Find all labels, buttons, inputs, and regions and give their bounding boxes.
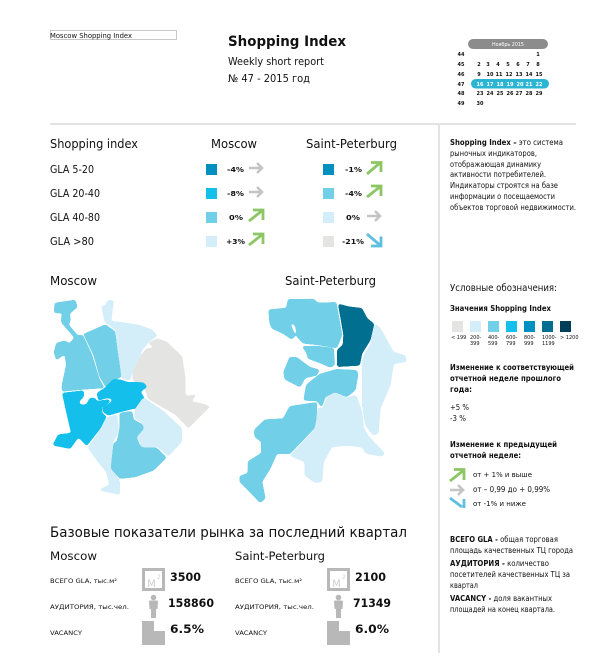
panel: Saint-Peterburg indicators: 2100 bbox=[355, 570, 386, 584]
legend: index values: 599 bbox=[488, 341, 498, 347]
table headings: Saint-Peterburg bbox=[306, 137, 397, 151]
legend: definitions: площадь качественных ТЦ города bbox=[450, 546, 573, 555]
calendar: 44 bbox=[458, 52, 465, 58]
legend: definitions bbox=[450, 535, 573, 614]
legend: index values: 400- bbox=[488, 335, 500, 341]
calendar: 28 bbox=[526, 91, 533, 97]
panel: Saint-Peterburg indicators bbox=[235, 549, 391, 645]
legend: year-over-year change: Изменение к соответствующей bbox=[450, 363, 574, 372]
calendar: 8 bbox=[536, 62, 540, 68]
icon: area: м bbox=[332, 576, 341, 591]
calendar: 12 bbox=[506, 72, 513, 78]
icon: area bbox=[328, 570, 348, 591]
calendar: 30 bbox=[477, 101, 484, 107]
icon: vacancy bbox=[142, 621, 165, 645]
calendar: 46 bbox=[458, 72, 465, 78]
calendar: 15 bbox=[536, 72, 543, 78]
legend: index values: 999 bbox=[524, 341, 534, 347]
legend: definitions: АУДИТОРИЯ - количество bbox=[450, 559, 549, 568]
calendar: 18 bbox=[497, 82, 504, 88]
calendar: 21 bbox=[526, 82, 533, 88]
row: GLA >80: -21% bbox=[342, 238, 364, 246]
calendar: 11 bbox=[496, 72, 503, 78]
icon: area: м bbox=[147, 576, 156, 591]
row: GLA 40-80: 0% bbox=[346, 214, 360, 222]
calendar: Ноябрь 2015 bbox=[492, 42, 524, 48]
legend: index values: < 199 bbox=[451, 335, 466, 341]
calendar: 17 bbox=[487, 82, 494, 88]
calendar: 14 bbox=[526, 72, 533, 78]
icon: area: 2 bbox=[342, 574, 346, 581]
calendar: 24 bbox=[487, 91, 494, 97]
legend: index values bbox=[450, 304, 579, 347]
calendar: 48 bbox=[458, 91, 465, 97]
title block bbox=[228, 34, 347, 85]
calendar: 16 bbox=[477, 82, 484, 88]
row: GLA 40-80: 0% bbox=[229, 214, 243, 222]
calendar: 4 bbox=[496, 62, 500, 68]
legend: year-over-year change: отчетной неделе прошлого bbox=[450, 374, 561, 383]
panel: Moscow indicators: 158860 bbox=[168, 596, 214, 610]
icon: area: 2 bbox=[157, 574, 161, 581]
description text: информации о посещаемости bbox=[450, 192, 555, 201]
map: Saint-Peterburg: Saint-Peterburg bbox=[285, 274, 376, 288]
title block: Shopping Index bbox=[228, 34, 347, 50]
panel: Saint-Peterburg indicators: VACANCY bbox=[235, 629, 267, 637]
panel: Saint-Peterburg indicators: 6.0% bbox=[355, 622, 389, 636]
calendar: 45 bbox=[458, 62, 465, 68]
panel: Moscow indicators: АУДИТОРИЯ, тыс.чел. bbox=[50, 603, 129, 611]
panel: Moscow indicators: ВСЕГО GLA, тыс.м² bbox=[50, 577, 117, 585]
row: GLA 20-40: -4% bbox=[345, 190, 362, 198]
calendar: 10 bbox=[487, 72, 494, 78]
legend: week-over-week change: Изменение к предыдущей bbox=[450, 440, 557, 449]
calendar: 20 bbox=[517, 82, 524, 88]
legend: year-over-year change: +5 % bbox=[450, 403, 469, 412]
calendar: 13 bbox=[516, 72, 523, 78]
title block: Weekly short report bbox=[228, 56, 324, 68]
calendar: 47 bbox=[458, 82, 465, 88]
legend: week-over-week change: отчетной неделе: bbox=[450, 451, 521, 460]
label box: Moscow Shopping Index: Moscow Shopping Index bbox=[50, 32, 132, 40]
legend: week-over-week change: от – 0,99 до + 0,99% bbox=[473, 485, 550, 494]
row: GLA 5-20: -4% bbox=[227, 166, 244, 174]
calendar: 3 bbox=[486, 62, 490, 68]
legend: index values: 1000- bbox=[542, 335, 557, 341]
calendar: 49 bbox=[458, 101, 465, 107]
legend: definitions: квартал bbox=[450, 581, 478, 590]
calendar: 22 bbox=[536, 82, 543, 88]
map: Saint-Peterburg bbox=[240, 274, 406, 502]
label box: Moscow Shopping Index bbox=[50, 30, 176, 40]
calendar: 19 bbox=[507, 82, 514, 88]
index table bbox=[50, 137, 397, 248]
legend: index values: 399 bbox=[470, 341, 480, 347]
row: GLA 20-40: -8% bbox=[227, 190, 244, 198]
row: GLA >80: GLA >80 bbox=[50, 236, 94, 248]
map: Moscow: Moscow bbox=[50, 274, 97, 288]
legend: index values: 200- bbox=[470, 335, 482, 341]
panel: Saint-Peterburg indicators: ВСЕГО GLA, тыс.м² bbox=[235, 577, 302, 585]
legend heading: Условные обозначения: bbox=[450, 283, 557, 294]
icon: person bbox=[334, 595, 343, 618]
legend: week-over-week change: от + 1% и выше bbox=[473, 471, 532, 479]
calendar: 25 bbox=[497, 91, 504, 97]
icon: vacancy bbox=[327, 621, 350, 645]
calendar: 5 bbox=[506, 62, 510, 68]
calendar bbox=[458, 39, 549, 107]
icon: area bbox=[144, 570, 164, 591]
legend: definitions: ВСЕГО GLA - общая торговая bbox=[450, 535, 558, 544]
description text bbox=[450, 138, 576, 212]
table headings: Moscow bbox=[211, 137, 257, 151]
row: GLA 40-80 bbox=[50, 210, 380, 224]
map: Moscow bbox=[50, 274, 209, 494]
legend: year-over-year change: года: bbox=[450, 385, 472, 394]
calendar: 29 bbox=[536, 91, 543, 97]
panel: Moscow indicators: 3500 bbox=[170, 570, 201, 584]
panel: Moscow indicators bbox=[50, 549, 214, 645]
legend: definitions: посетителей качественных ТЦ за bbox=[450, 570, 570, 579]
calendar: 26 bbox=[507, 91, 514, 97]
title block: № 47 - 2015 год bbox=[228, 73, 310, 85]
row: GLA 20-40 bbox=[50, 186, 381, 200]
row: GLA 5-20: -1% bbox=[345, 166, 362, 174]
section heading: market indicators: Базовые показатели рынка за последний квартал bbox=[50, 525, 407, 541]
calendar: 6 bbox=[516, 62, 520, 68]
panel: Saint-Peterburg indicators: 71349 bbox=[353, 596, 391, 610]
legend: index values: > 1200 bbox=[560, 335, 579, 341]
panel: Moscow indicators: Moscow bbox=[50, 549, 97, 563]
legend: week-over-week change: от -1% и ниже bbox=[473, 500, 526, 508]
row: GLA >80: +3% bbox=[226, 238, 245, 246]
calendar: 27 bbox=[516, 91, 523, 97]
legend: index values: Значения Shopping Index bbox=[450, 304, 551, 313]
row: GLA 20-40: GLA 20-40 bbox=[50, 188, 100, 200]
row: GLA 40-80: GLA 40-80 bbox=[50, 212, 100, 224]
table headings: Shopping index bbox=[50, 137, 138, 151]
panel: Moscow indicators: 6.5% bbox=[170, 622, 204, 636]
calendar: 1 bbox=[536, 52, 540, 58]
calendar: 7 bbox=[526, 62, 530, 68]
legend: week-over-week change bbox=[450, 440, 557, 508]
description text: Shopping Index – это система bbox=[450, 138, 563, 147]
legend: index values: 799 bbox=[506, 341, 516, 347]
description text: отображающая динамику bbox=[450, 160, 541, 169]
panel: Saint-Peterburg indicators: Saint-Peterburg bbox=[235, 549, 325, 563]
description text: объектов торговой недвижимости. bbox=[450, 203, 576, 212]
description text: рыночных индикаторов, bbox=[450, 149, 537, 158]
legend: year-over-year change bbox=[450, 363, 574, 423]
description text: Индикаторы строятся на базе bbox=[450, 181, 558, 190]
panel: Moscow indicators: VACANCY bbox=[50, 629, 82, 637]
row: GLA 5-20 bbox=[50, 162, 381, 176]
row: GLA >80 bbox=[50, 234, 381, 248]
legend: index values: 600- bbox=[506, 335, 518, 341]
row: GLA 5-20: GLA 5-20 bbox=[50, 164, 94, 176]
legend: definitions: площадей на конец квартала. bbox=[450, 605, 555, 614]
legend: year-over-year change: -3 % bbox=[450, 414, 466, 423]
calendar: 23 bbox=[477, 91, 484, 97]
table headings bbox=[50, 137, 397, 151]
calendar: 2 bbox=[477, 62, 481, 68]
icon: person bbox=[149, 595, 158, 618]
panel: Saint-Peterburg indicators: АУДИТОРИЯ, тыс.чел. bbox=[235, 603, 314, 611]
legend: index values: 800- bbox=[524, 335, 536, 341]
legend: definitions: VACANCY - доля вакантных bbox=[450, 594, 553, 603]
calendar: 9 bbox=[477, 72, 481, 78]
description text: активности потребителей. bbox=[450, 170, 546, 179]
legend: index values: 1199 bbox=[542, 341, 555, 347]
